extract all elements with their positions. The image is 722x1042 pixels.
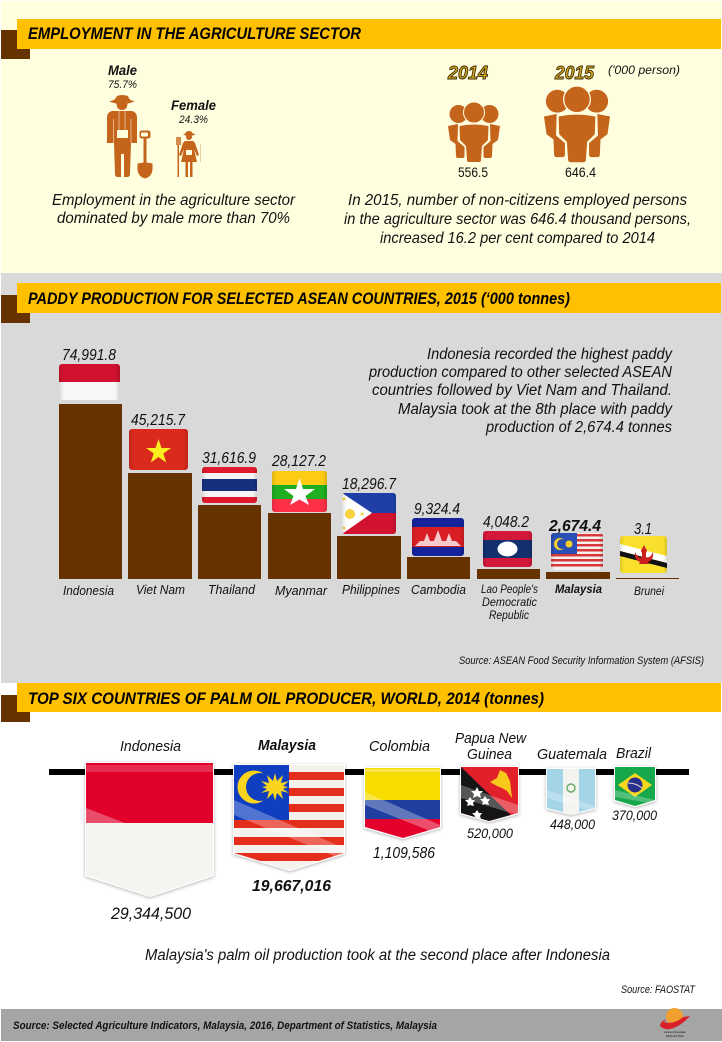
country labels: Malaysia (555, 582, 602, 596)
value 2015: 646.4 (565, 165, 596, 180)
value labels: 4,048.2 (483, 514, 529, 531)
flag: Malaysia (551, 533, 603, 570)
unit label: ('000 person) (608, 63, 680, 77)
flag: Thailand (202, 467, 257, 503)
values: palm oil (110, 808, 657, 923)
country labels (63, 582, 664, 622)
country names: palm oil: Guinea (467, 747, 512, 763)
value labels: 28,127.2 (271, 453, 326, 470)
pennant string (49, 769, 689, 775)
bar chart: paddy production (59, 347, 679, 622)
flag: Philippines (342, 493, 396, 534)
heading: employment (1, 19, 721, 59)
icon: department logo (660, 1008, 690, 1038)
female percentage: 24.3% (178, 114, 208, 126)
female label: Female (171, 97, 216, 113)
text: male employment summary: dominated by male more than 70% (57, 210, 290, 227)
heading: palm oil (1, 683, 721, 722)
flag: Cambodia (412, 518, 464, 556)
text: paddy summary (368, 346, 673, 436)
country labels: Lao People's (481, 582, 538, 596)
icon: department logo: MALAYSIA (666, 1034, 684, 1038)
country names: palm oil: Colombia (369, 739, 430, 755)
value labels: 74,991.8 (62, 347, 116, 364)
values: palm oil: 448,000 (550, 817, 595, 832)
values: palm oil: 370,000 (612, 808, 657, 823)
footer source text: Source: Selected Agriculture Indicators, Malaysia, 2016, Department of Statistics, Malaysia (13, 1020, 437, 1032)
icon: male farmer (107, 95, 152, 178)
text: male employment summary: Employment in the agriculture sector (52, 192, 296, 209)
values: palm oil: 520,000 (467, 826, 513, 841)
label: 2015: 2015 (554, 63, 595, 83)
text: palm oil summary: Malaysia's palm oil production took at the second place after Indonesia (145, 947, 610, 964)
value labels: 45,215.7 (131, 412, 186, 429)
country names: palm oil (120, 731, 652, 763)
flag: Brunei (620, 536, 667, 573)
pennant: Indonesia (85, 762, 214, 898)
country labels: Republic (489, 608, 529, 622)
icon: department logo: Jabatan Perangkaan (664, 1030, 686, 1034)
values: palm oil: 29,344,500 (110, 905, 192, 923)
pennant: Malaysia (233, 764, 345, 871)
country labels: Myanmar (275, 584, 328, 598)
value labels: 18,296.7 (342, 476, 397, 493)
pennant: Colombia (364, 767, 441, 839)
value labels: 31,616.9 (202, 450, 256, 467)
value labels: 2,674.4 (548, 518, 601, 535)
panel: footer bar (1, 1009, 722, 1041)
country labels: Indonesia (63, 584, 114, 598)
text: paddy summary: production of 2,674.4 tonnes (485, 419, 672, 436)
text: paddy summary: Indonesia recorded the highest paddy (427, 346, 673, 363)
icon: people 2015 (544, 86, 610, 162)
value labels (62, 347, 652, 538)
flag: Laos (483, 531, 532, 567)
value labels: 9,324.4 (414, 501, 460, 518)
country names: palm oil: Papua New (455, 731, 527, 747)
country labels: Viet Nam (136, 583, 185, 597)
text: male employment summary (52, 192, 296, 227)
pennant: Brazil (614, 766, 656, 807)
country names: palm oil: Brazil (616, 746, 652, 762)
text: non-citizens summary: in the agriculture sector was 646.4 thousand persons, (344, 211, 691, 228)
country labels: Philippines (342, 583, 400, 597)
source: FAOSTAT: Source: FAOSTAT (621, 984, 696, 996)
country labels: Cambodia (411, 583, 466, 597)
male label: Male (108, 62, 137, 78)
icon: female farmer (176, 131, 201, 177)
heading: paddy: PADDY PRODUCTION FOR SELECTED ASEAN COUNTRIES, 2015 (‘000 tonnes) (28, 290, 570, 308)
flag: Indonesia (59, 364, 120, 400)
heading: paddy (1, 283, 721, 323)
panel: employment background (1, 1, 722, 273)
flag: Myanmar (272, 471, 327, 512)
country names: palm oil: Guatemala (537, 747, 607, 763)
country labels: Thailand (208, 583, 256, 597)
value labels: 3.1 (634, 521, 652, 538)
flag: Viet Nam (129, 429, 188, 470)
icon: people 2014 (448, 102, 500, 162)
heading: employment: EMPLOYMENT IN THE AGRICULTURE SECTOR (28, 25, 361, 43)
country labels: Democratic (482, 595, 537, 609)
country names: palm oil: Malaysia (258, 738, 316, 754)
text: non-citizens summary: increased 16.2 per cent compared to 2014 (380, 230, 655, 247)
text: paddy summary: Malaysia took at the 8th place with paddy (398, 401, 673, 418)
values: palm oil: 1,109,586 (373, 845, 435, 862)
values: palm oil: 19,667,016 (252, 878, 331, 895)
country labels: Brunei (634, 584, 664, 598)
bars (59, 404, 679, 579)
country names: palm oil: Indonesia (120, 739, 181, 755)
pennant: Guatemala (546, 768, 596, 815)
panel: paddy background (1, 273, 722, 683)
male percentage: 75.7% (108, 79, 137, 91)
pennant: Papua New Guinea (460, 766, 519, 822)
heading: palm oil: TOP SIX COUNTRIES OF PALM OIL PRODUCER, WORLD, 2014 (tonnes) (28, 690, 544, 708)
text: paddy summary: production compared to other selected ASEAN (368, 364, 673, 381)
text: non-citizens summary: In 2015, number of non-citizens employed persons (348, 192, 687, 209)
text: non-citizens summary (344, 192, 691, 247)
label: 2014: 2014 (447, 63, 488, 83)
value 2014: 556.5 (458, 165, 488, 180)
text: paddy summary: countries followed by Viet Nam and Thailand. (372, 382, 672, 399)
